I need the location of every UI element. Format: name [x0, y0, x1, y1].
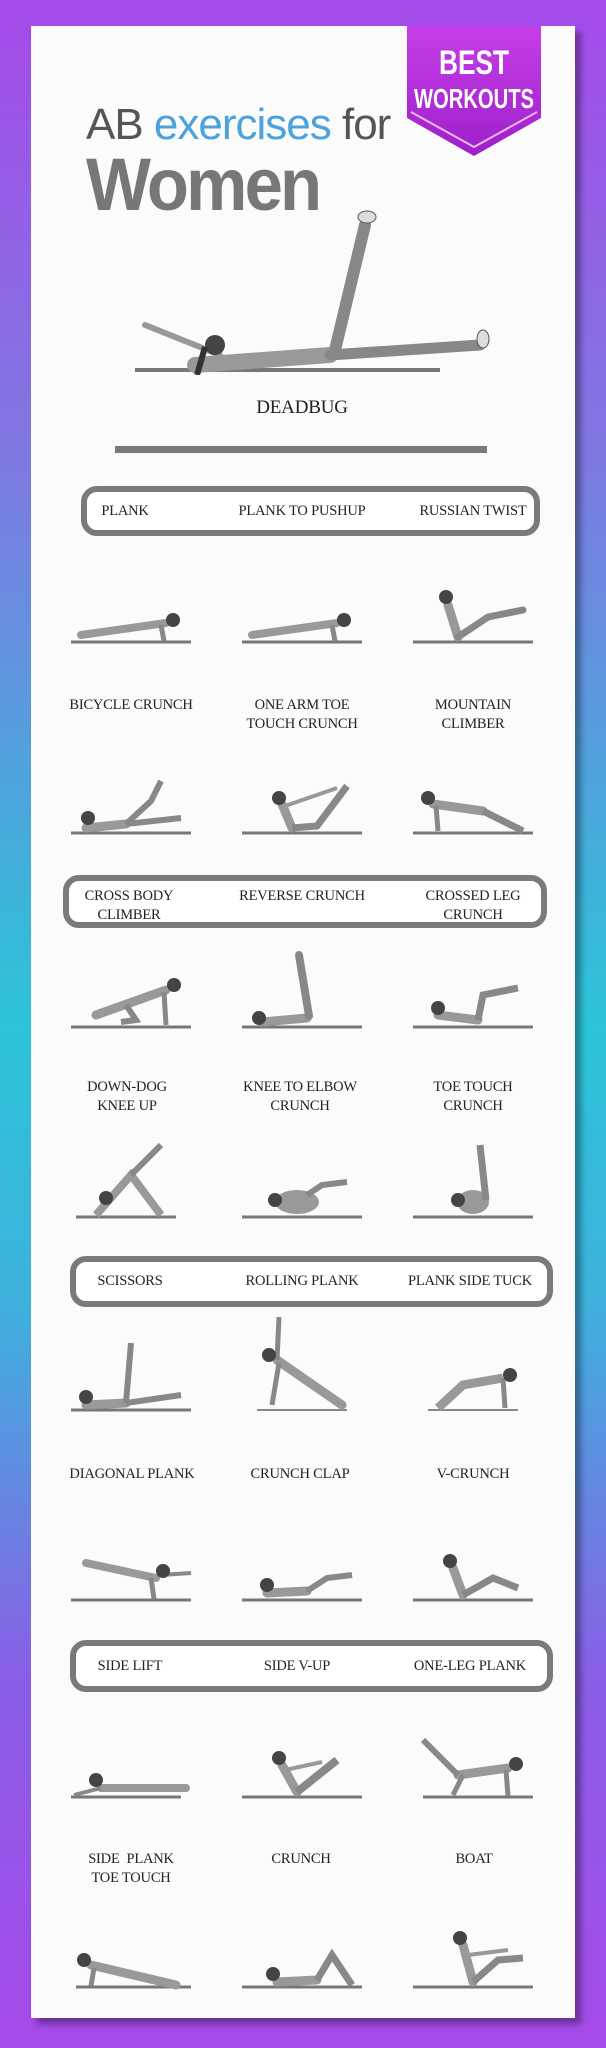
text: CLIMBER [97, 907, 161, 923]
text: CROSSED LEG [426, 888, 520, 904]
text: CLIMBER [441, 716, 505, 732]
text: CRUNCH [271, 1851, 331, 1867]
text: REVERSE CRUNCH [239, 888, 365, 904]
title: Women [86, 143, 319, 226]
hero figure: deadbug [135, 210, 490, 375]
text: CRUNCH [443, 1098, 503, 1114]
text: DOWN-DOG [87, 1079, 167, 1095]
text: PLANK [101, 503, 149, 519]
labels row 3 [85, 888, 520, 923]
labels row 1 [101, 503, 527, 519]
title: AB exercises for [86, 100, 390, 149]
text: KNEE UP [97, 1098, 157, 1114]
figures row 8 [76, 1931, 533, 1990]
text: BOAT [455, 1851, 493, 1867]
figures row 2 [71, 780, 533, 834]
text: BICYCLE CRUNCH [69, 697, 193, 713]
labels row 6 [69, 1466, 510, 1482]
figures row 5 [71, 1316, 518, 1412]
figures row 1 [71, 590, 533, 644]
heading: deadbug: DEADBUG [256, 397, 348, 418]
labels row 4 [87, 1079, 513, 1114]
text: CRUNCH [270, 1098, 330, 1114]
text: DIAGONAL PLANK [69, 1466, 195, 1482]
text: PLANK TO PUSHUP [238, 503, 366, 519]
text: CRUNCH CLAP [251, 1466, 349, 1482]
text: KNEE TO ELBOW [243, 1079, 357, 1095]
figures row 4 [76, 1143, 533, 1218]
text: ONE ARM TOE [255, 697, 349, 713]
text: SIDE LIFT [98, 1658, 162, 1674]
text: PLANK SIDE TUCK [408, 1273, 532, 1289]
text: MOUNTAIN [435, 697, 511, 713]
labels row 2 [69, 697, 511, 732]
text: RUSSIAN TWIST [419, 503, 527, 519]
group 3 box [70, 1256, 553, 1307]
text: ONE-LEG PLANK [414, 1658, 526, 1674]
text: SIDE V-UP [264, 1658, 330, 1674]
group 1 box [81, 486, 540, 536]
divider bar [115, 446, 487, 453]
figures row 7 [71, 1738, 533, 1798]
title [86, 100, 391, 226]
figures row 3 [71, 951, 533, 1028]
labels row 7 [98, 1658, 526, 1674]
text: SIDE PLANK [88, 1851, 174, 1867]
text: CROSS BODY [85, 888, 173, 904]
figures row 6 [71, 1554, 533, 1602]
text: TOE TOUCH [433, 1079, 513, 1095]
text: SCISSORS [97, 1273, 163, 1289]
text: TOUCH CRUNCH [246, 716, 358, 732]
text: V-CRUNCH [437, 1466, 509, 1482]
text: TOE TOUCH [91, 1870, 171, 1886]
text: CRUNCH [443, 907, 503, 923]
group 2 box [63, 875, 547, 928]
text: ROLLING PLANK [246, 1273, 358, 1289]
labels row 5 [97, 1273, 532, 1289]
badge: best workouts: BEST [439, 44, 509, 82]
labels row 8 [88, 1851, 493, 1886]
group 4 box [70, 1640, 553, 1692]
badge: best workouts [407, 26, 541, 156]
